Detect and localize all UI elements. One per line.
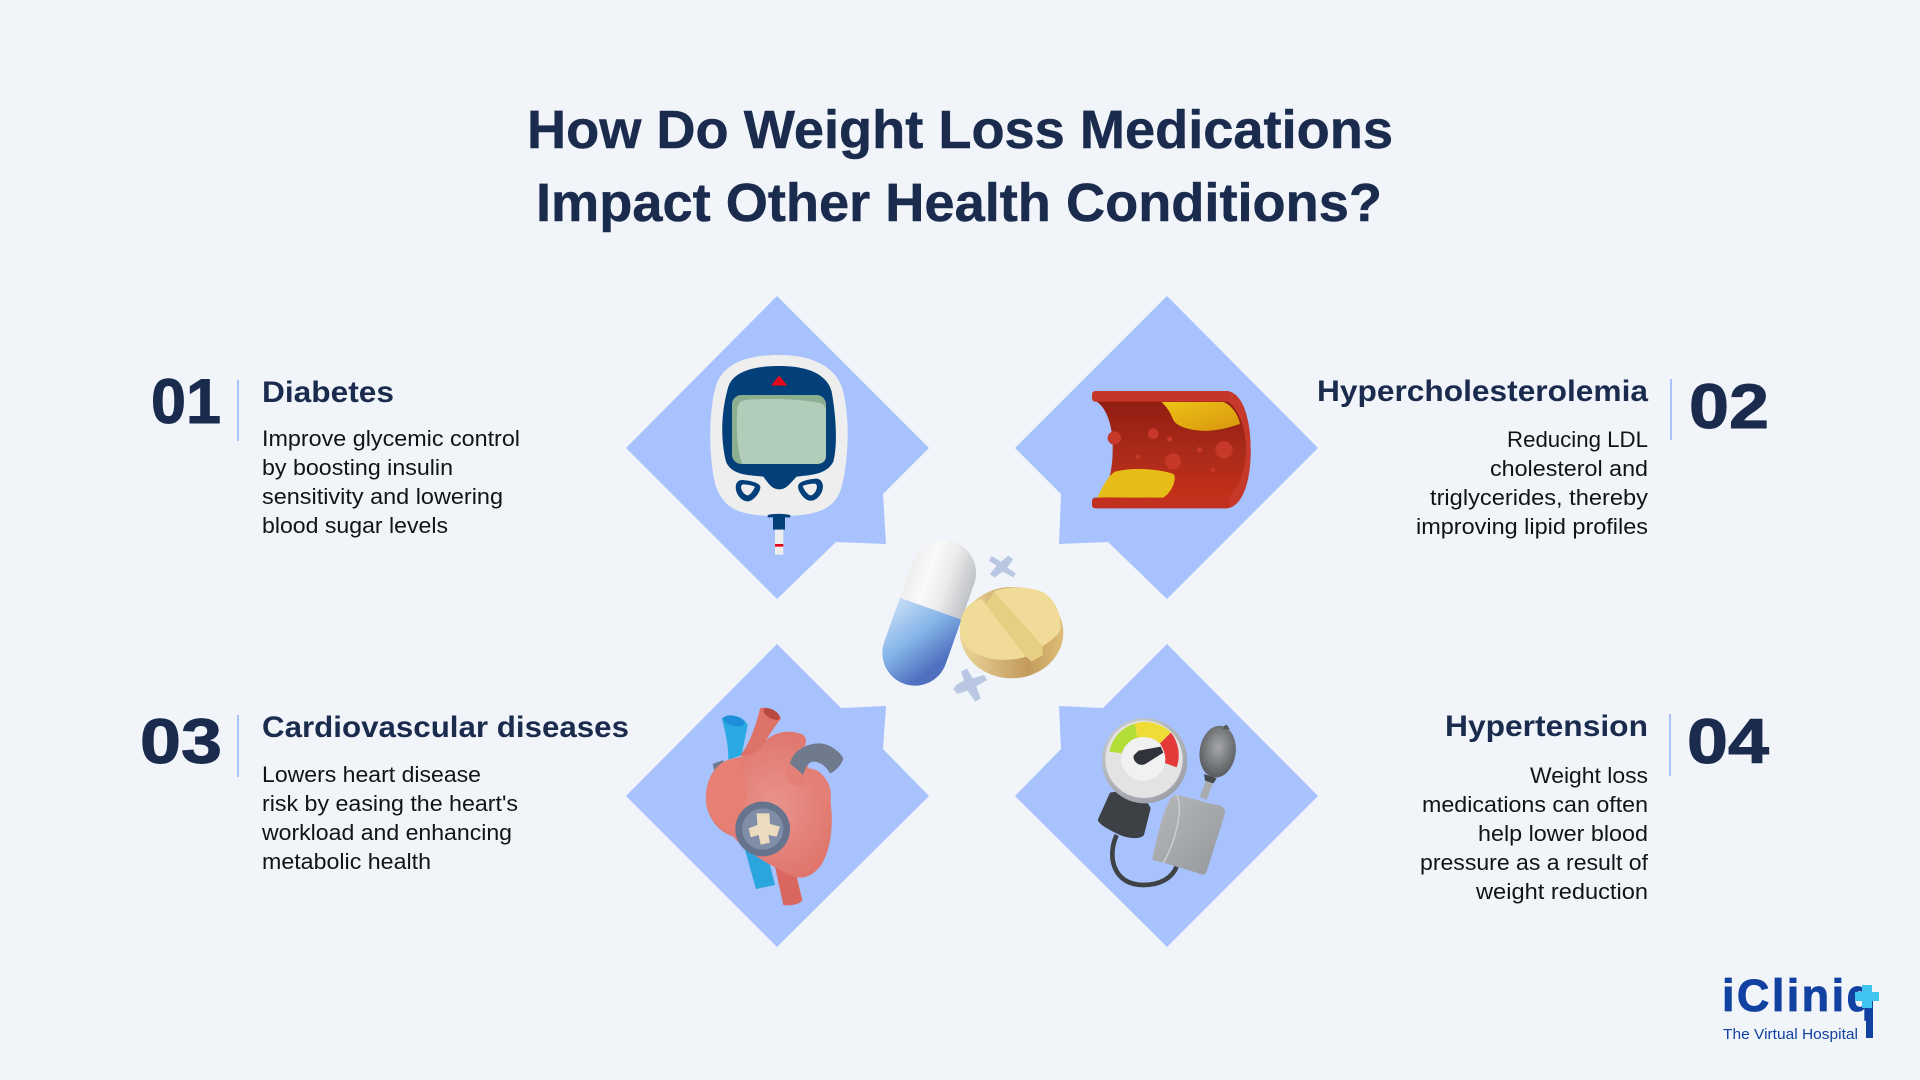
plus marks bbox=[953, 556, 1016, 702]
description: hypercholesterolemia: Reducing LDL bbox=[1507, 427, 1648, 452]
description: diabetes: blood sugar levels bbox=[262, 513, 448, 538]
description: hypercholesterolemia: improving lipid profiles bbox=[1416, 514, 1648, 539]
number 02: 02 bbox=[1689, 372, 1769, 442]
description: cardiovascular bbox=[261, 762, 518, 874]
diamond: diabetes bbox=[626, 296, 929, 599]
description: diabetes: by boosting insulin bbox=[262, 455, 453, 480]
number 04: 04 bbox=[1687, 707, 1769, 777]
panel: diabetes text bbox=[151, 367, 520, 538]
description: hypertension: Weight loss bbox=[1530, 763, 1648, 788]
logo tagline: The Virtual Hospital bbox=[1723, 1027, 1858, 1043]
logo: iCliniq: iCliniq bbox=[1722, 970, 1874, 1021]
heading: diabetes: Diabetes bbox=[262, 376, 394, 409]
title bbox=[527, 100, 1393, 233]
panel: hypercholesterolemia text bbox=[1317, 372, 1769, 539]
heading: cardiovascular diseases: Cardiovascular diseases bbox=[262, 711, 629, 744]
description: cardiovascular: risk by easing the heart's bbox=[262, 791, 518, 816]
icon: artery with plaque bbox=[1092, 391, 1251, 508]
description: hypertension: help lower blood bbox=[1478, 821, 1648, 846]
icon: heart bbox=[706, 706, 843, 905]
diamond: hypercholesterolemia bbox=[1015, 296, 1318, 599]
icon: blood pressure gauge bbox=[1098, 718, 1239, 885]
logo: iCliniq bbox=[1722, 970, 1879, 1043]
description: cardiovascular: metabolic health bbox=[262, 849, 431, 874]
icon: capsule and tablet bbox=[873, 531, 1063, 702]
description: hypertension bbox=[1420, 763, 1649, 904]
description: diabetes: sensitivity and lowering bbox=[262, 484, 503, 509]
description: cardiovascular: workload and enhancing bbox=[261, 820, 512, 845]
description: diabetes bbox=[262, 426, 520, 538]
description: hypercholesterolemia: cholesterol and bbox=[1490, 456, 1648, 481]
diamond: hypertension bbox=[1015, 644, 1318, 947]
description: hypercholesterolemia: triglycerides, thereby bbox=[1430, 485, 1648, 510]
description: hypercholesterolemia bbox=[1416, 427, 1648, 539]
heading: hypercholesterolemia: Hypercholesterolemia bbox=[1317, 375, 1649, 408]
description: diabetes: Improve glycemic control bbox=[262, 426, 520, 451]
icon: glucose meter bbox=[710, 355, 848, 555]
number 03: 03 bbox=[140, 707, 222, 777]
heading: hypertension: Hypertension bbox=[1445, 710, 1648, 743]
title: Impact Other Health Conditions? bbox=[536, 173, 1382, 233]
panel: cardiovascular text bbox=[140, 707, 629, 874]
description: cardiovascular: Lowers heart disease bbox=[262, 762, 481, 787]
number 01: 01 bbox=[151, 367, 221, 437]
diamond: cardiovascular bbox=[626, 644, 929, 947]
title: How Do Weight Loss Medications bbox=[527, 100, 1393, 160]
description: hypertension: weight reduction bbox=[1475, 879, 1648, 904]
panel: hypertension text bbox=[1420, 707, 1769, 904]
tablet bbox=[960, 587, 1063, 678]
description: hypertension: medications can often bbox=[1422, 792, 1648, 817]
description: hypertension: pressure as a result of bbox=[1420, 850, 1649, 875]
capsule bbox=[873, 531, 985, 695]
